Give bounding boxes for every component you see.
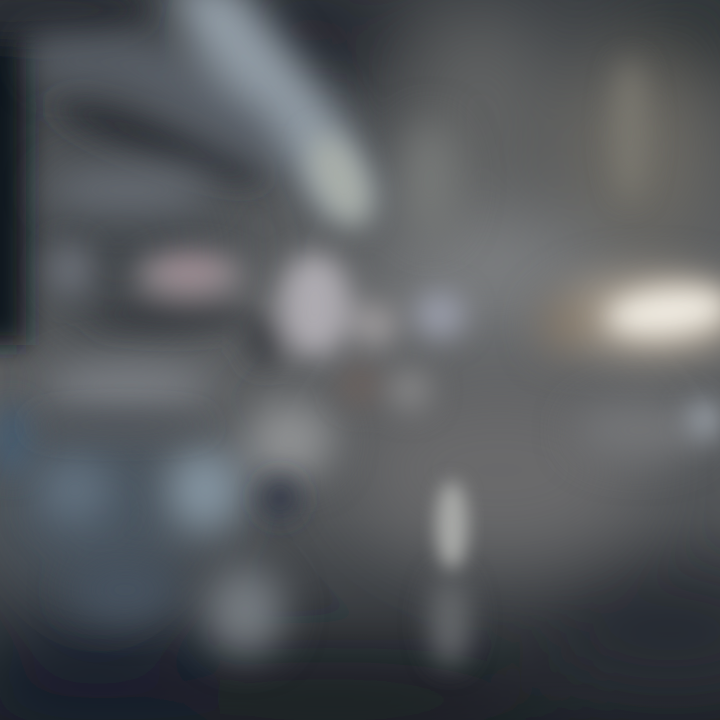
light flare core [604,282,720,342]
left dark edge [0,0,270,476]
light flare glow [539,270,720,360]
vertical streak highlight [436,481,468,569]
